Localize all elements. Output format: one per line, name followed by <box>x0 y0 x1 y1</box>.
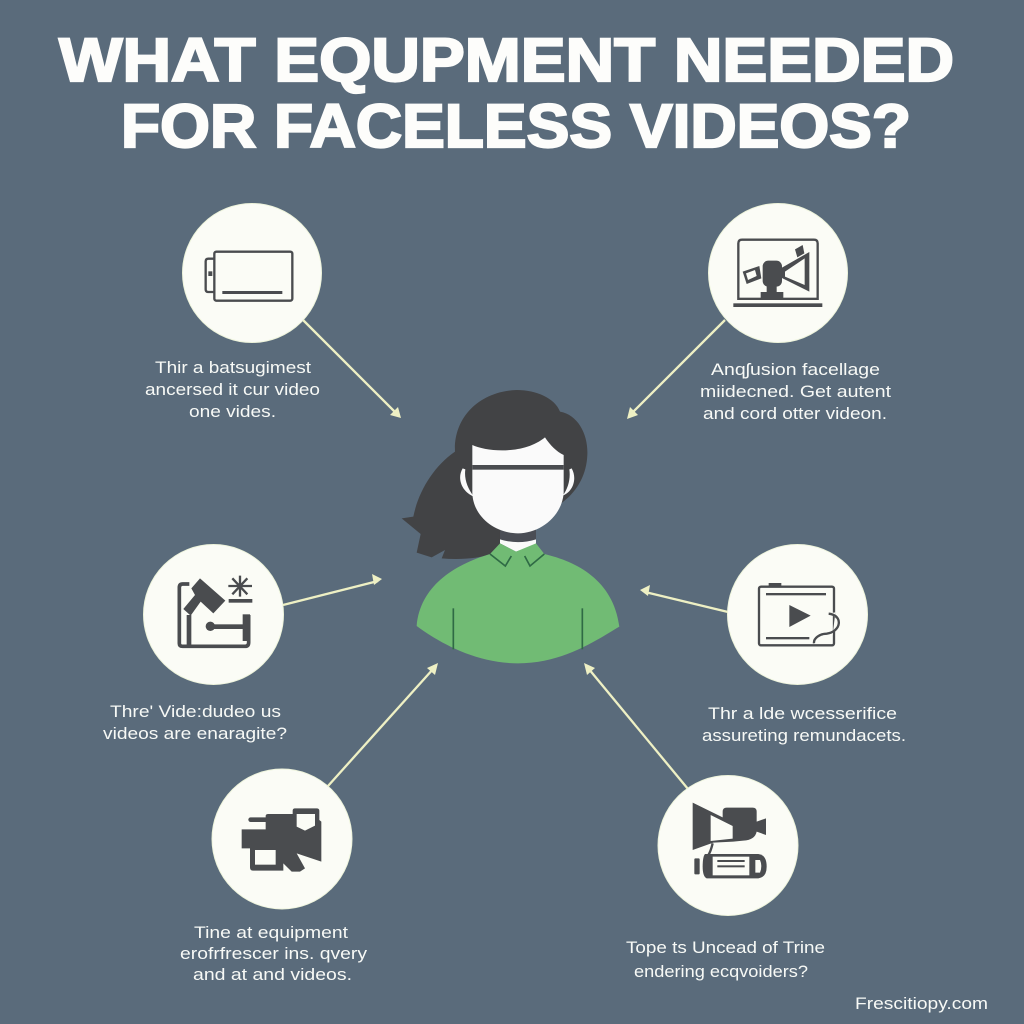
text block <box>702 704 906 745</box>
text block: and cord otter videon. <box>703 404 887 423</box>
glasses band <box>472 465 564 470</box>
text block: Thre' Vide:dudeo us <box>110 702 281 721</box>
arrow: top right to person <box>627 320 725 419</box>
neck <box>500 527 536 552</box>
central person figure <box>402 390 619 663</box>
text block: Tope ts Uncead of Trine <box>626 938 825 957</box>
text block: Thr a lde wcesserifice <box>708 704 897 723</box>
footer website: Frescitiopy.com <box>855 994 988 1013</box>
arrow: middle left to person <box>283 574 382 605</box>
text block: and at and videos. <box>193 965 352 984</box>
text block: assureting remundacets. <box>702 726 906 745</box>
text block: Anqʃusion facellage <box>711 360 880 379</box>
arrow: top left to person <box>303 320 401 418</box>
face <box>472 437 564 533</box>
panel: middle left microscope item <box>103 544 287 743</box>
title: FOR FACELESS VIDEOS? <box>121 92 911 160</box>
text block <box>103 702 287 743</box>
text block <box>180 923 368 984</box>
panel: middle right video player item <box>702 544 906 745</box>
icon: video player <box>759 583 839 645</box>
text block: videos are enaragite? <box>103 724 287 743</box>
arrow: bottom right to person <box>584 663 688 789</box>
arrow: middle right to person <box>640 585 728 612</box>
panel: bottom left camcorder item <box>180 769 368 984</box>
hair <box>402 390 587 559</box>
icon: movie camera and recorder <box>693 803 767 878</box>
panel: top right laptop camera item <box>700 204 891 423</box>
text block <box>700 360 891 423</box>
icon: battery screen <box>206 252 292 301</box>
panel: top left battery item <box>145 204 322 421</box>
text block: endering ecqvoiders? <box>634 962 808 981</box>
text block <box>145 358 320 421</box>
icon: boom arm rig <box>179 576 252 646</box>
title: WHAT EQUPMENT NEEDED <box>59 26 954 94</box>
text block: Tine at equipment <box>194 923 348 942</box>
text block: erofrfrescer ins. qvery <box>180 944 368 963</box>
panel: bottom right camera item <box>626 776 825 981</box>
icon: camcorder solid <box>242 808 321 872</box>
ears <box>460 468 574 497</box>
title <box>59 26 954 160</box>
green shirt <box>417 543 619 663</box>
icon: laptop with camera <box>733 240 822 307</box>
shirt lines <box>453 554 582 649</box>
text block: ancersed it cur video <box>145 380 320 399</box>
text block: Thir a batsugimest <box>155 358 311 377</box>
text block: miidecned. Get autent <box>700 382 891 401</box>
arrow: bottom left to person <box>328 663 438 786</box>
text block <box>626 938 825 981</box>
text block: one vides. <box>189 402 276 421</box>
